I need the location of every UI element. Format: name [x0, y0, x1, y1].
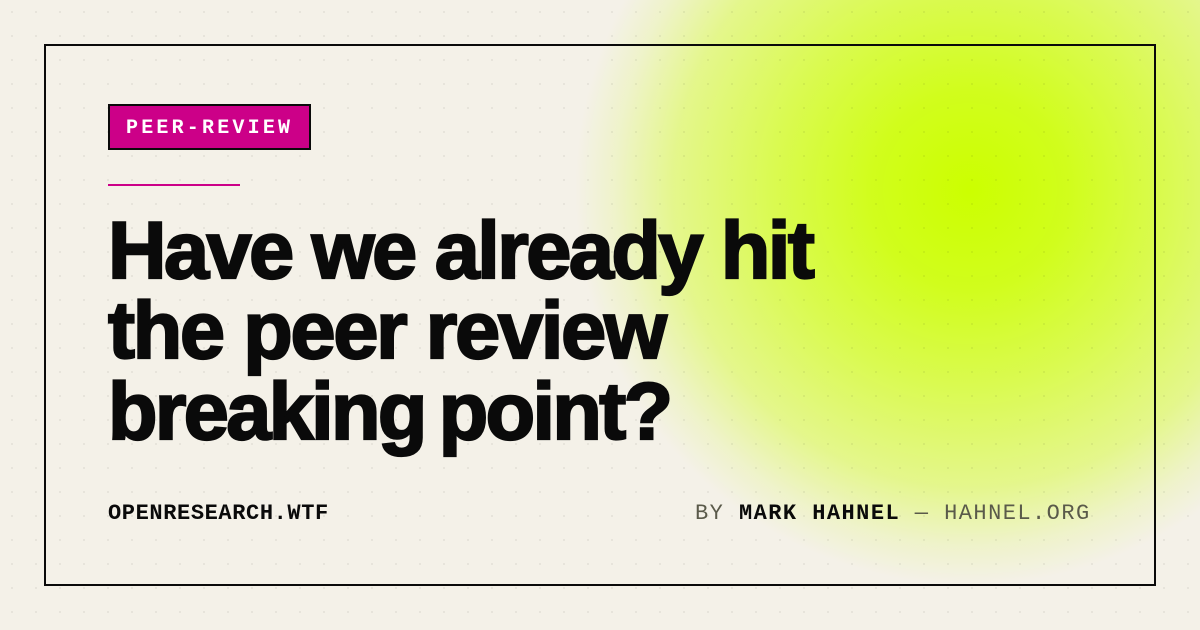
title: the peer review [108, 286, 665, 376]
site name: OPENRESEARCH.WTF [108, 501, 329, 526]
frame [44, 44, 1156, 586]
tag: peer-review [108, 104, 311, 150]
title: Have we already hit [108, 206, 812, 296]
title [108, 206, 815, 458]
tag: peer-review: PEER-REVIEW [126, 117, 293, 140]
byline: BY MARK HAHNEL — HAHNEL.ORG [695, 501, 1091, 526]
accent rule [108, 184, 240, 186]
title: breaking point? [108, 367, 671, 457]
